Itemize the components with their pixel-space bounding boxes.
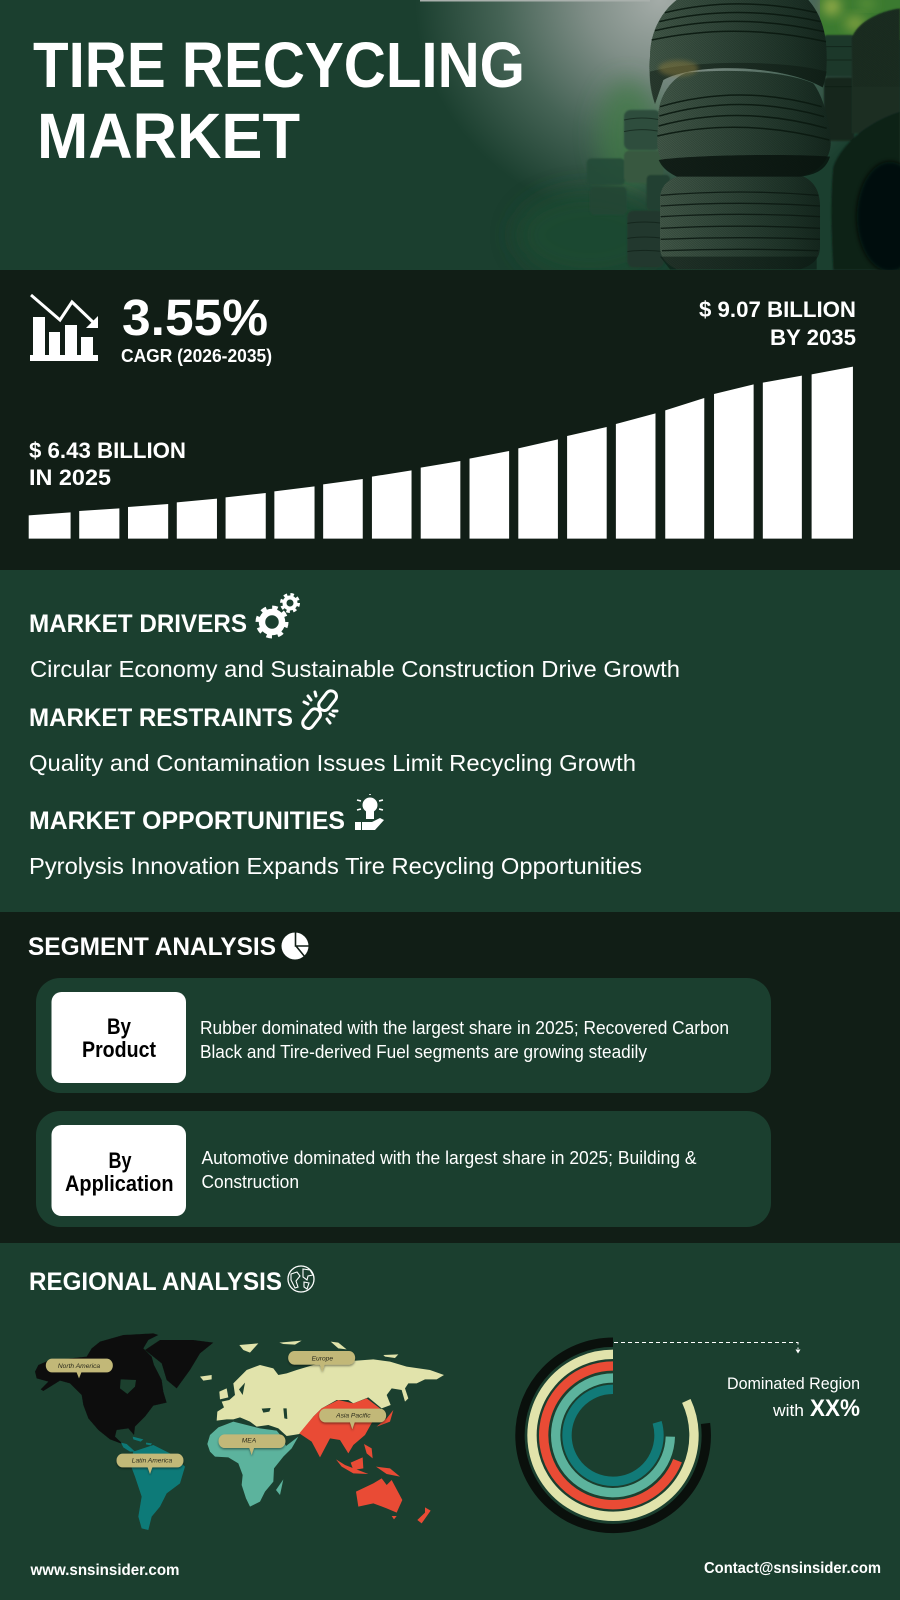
region: Middle East and Africa: [207, 1422, 298, 1507]
heading: market restraints: MARKET RESTRAINTS: [29, 704, 293, 732]
end value: BY 2035: [770, 325, 856, 350]
dashed leader arrow: [614, 1342, 800, 1354]
label: Europe: Europe: [312, 1355, 333, 1362]
label box: by product: Product: [82, 1037, 157, 1062]
heading: market drivers: MARKET DRIVERS: [29, 610, 247, 638]
heading: market opportunities: MARKET OPPORTUNITIES: [29, 807, 345, 835]
label: North America: North America: [58, 1363, 100, 1370]
panel: market dynamics: [0, 570, 900, 912]
icon: declining chart: [30, 295, 98, 361]
text: drivers: Circular Economy and Sustainable Construction Drive Growth: [30, 656, 680, 682]
title: MARKET: [37, 100, 300, 172]
label: Asia Pacific: [319, 1409, 386, 1429]
callout: dominated region: with: [772, 1402, 804, 1420]
icon: broken link: [300, 689, 339, 731]
label box: by application: Application: [65, 1171, 174, 1196]
text: product description: Black and Tire-derived Fuel segments are growing steadily: [200, 1042, 647, 1062]
tire: top: [649, 0, 827, 104]
icon: pie chart: [282, 932, 309, 960]
photo: stacked tires: [400, 0, 900, 280]
callout: dominated region: [727, 1375, 860, 1422]
text: product description: Rubber dominated with the largest share in 2025; Recovered Carbon: [200, 1018, 729, 1038]
card: by application: [36, 1111, 771, 1227]
end value: $ 9.07 BILLION: [699, 297, 856, 322]
text: application description: Automotive dominated with the largest share in 2025; Building &: [202, 1148, 696, 1168]
label: Asia Pacific: Asia Pacific: [335, 1413, 371, 1420]
region: Europe and north Asia: [200, 1341, 444, 1436]
panel: header: [0, 0, 900, 280]
label: Latin America: [117, 1454, 183, 1474]
title: [33, 29, 525, 172]
icon: globe: [288, 1266, 314, 1292]
label: North America: [46, 1359, 113, 1378]
start value: IN 2025: [29, 465, 111, 490]
panel: segment analysis: [0, 912, 900, 1243]
text: product description: [200, 1018, 729, 1062]
label: Latin America: Latin America: [132, 1458, 173, 1465]
footer: contact: Contact@snsinsider.com: [704, 1560, 881, 1577]
CAGR label: CAGR (2026-2035): [121, 346, 272, 366]
start value: $ 6.43 BILLION: [29, 438, 186, 463]
footer: website: www.snsinsider.com: [30, 1562, 179, 1579]
heading: segment analysis: SEGMENT ANALYSIS: [28, 933, 276, 961]
title: TIRE RECYCLING: [33, 29, 525, 101]
tire: middle: [657, 71, 831, 177]
region: North America: [35, 1333, 213, 1444]
label: MEA: MEA: [242, 1438, 257, 1445]
label: MEA: [219, 1434, 285, 1455]
label: Europe: [288, 1351, 355, 1372]
icon: gears: [258, 594, 298, 636]
icon: idea in hand: [355, 794, 384, 830]
card: by product: [36, 978, 771, 1093]
callout: dominated region: XX%: [810, 1395, 860, 1422]
label box: by application: [52, 1125, 186, 1216]
panel: market size: [0, 270, 900, 570]
world map: [35, 1333, 444, 1530]
region: Asia Pacific: [299, 1398, 431, 1523]
bar chart: [29, 367, 853, 539]
heading: regional analysis: REGIONAL ANALYSIS: [29, 1268, 282, 1296]
callout: dominated region: Dominated Region: [727, 1375, 860, 1393]
label box: by product: [52, 992, 186, 1083]
radial chart: [520, 1342, 706, 1528]
label box: by application: By: [108, 1148, 132, 1173]
tire: bottom: [660, 175, 820, 269]
start value: [29, 438, 186, 490]
text: application description: Construction: [202, 1172, 299, 1192]
end value: [699, 297, 856, 350]
region: Latin America: [121, 1437, 185, 1530]
text: opportunities: Pyrolysis Innovation Expands Tire Recycling Opportunities: [29, 853, 642, 879]
text: application description: [202, 1148, 696, 1192]
label box: by product: By: [107, 1014, 132, 1039]
CAGR value: 3.55%: [122, 289, 268, 346]
text: restraints: Quality and Contamination Issues Limit Recycling Growth: [29, 750, 636, 776]
panel: regional analysis: [0, 1243, 900, 1600]
